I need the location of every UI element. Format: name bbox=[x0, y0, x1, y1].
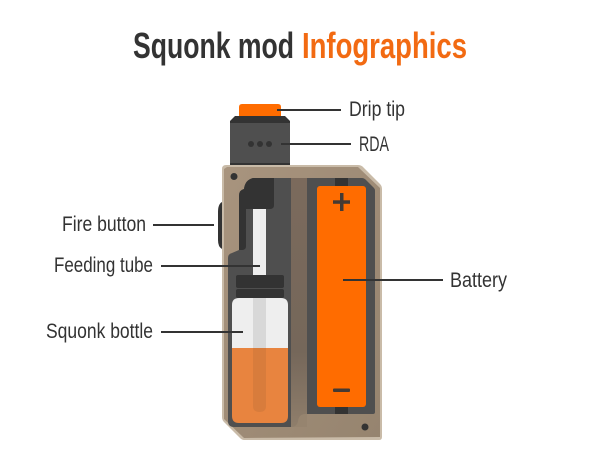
screws bbox=[230, 173, 238, 180]
title bbox=[133, 25, 467, 66]
divider corner bbox=[291, 414, 307, 427]
labels: Battery bbox=[450, 269, 507, 292]
mod body bbox=[222, 165, 382, 440]
labels bbox=[46, 98, 507, 343]
fire button bbox=[218, 202, 222, 249]
labels: Drip tip bbox=[349, 98, 405, 121]
left cavity bbox=[228, 178, 291, 427]
title: Infographics bbox=[302, 25, 467, 66]
battery cavity bbox=[307, 178, 375, 414]
drip tip bbox=[239, 104, 281, 116]
battery bbox=[317, 178, 366, 414]
RDA bbox=[230, 116, 290, 165]
leader lines bbox=[153, 110, 443, 332]
squonk bottle bbox=[232, 275, 288, 423]
feeding tube bbox=[253, 209, 266, 275]
labels: Squonk bottle bbox=[46, 320, 153, 343]
center divider bbox=[291, 178, 307, 427]
labels: RDA bbox=[359, 133, 389, 156]
labels: Fire button bbox=[62, 213, 146, 236]
tube housing bbox=[239, 178, 274, 250]
labels: Feeding tube bbox=[54, 254, 153, 277]
title: Squonk mod bbox=[133, 25, 294, 66]
